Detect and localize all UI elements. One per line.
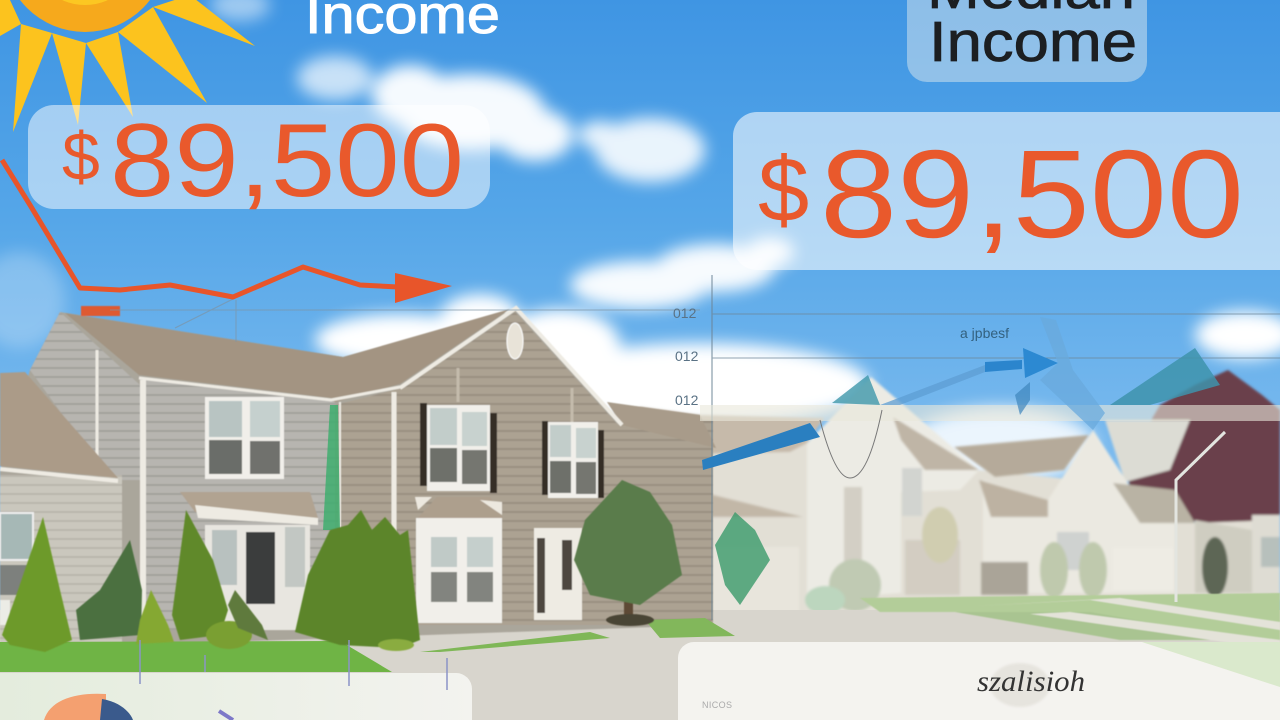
- house: tan gable siding: [400, 312, 618, 625]
- front door right: [534, 528, 582, 620]
- green chart shape: [715, 512, 770, 605]
- bottom-right panel: [678, 642, 1280, 720]
- main house: [0, 306, 716, 650]
- chart caption: a jpbesf: [960, 325, 1009, 341]
- backing wall for washed houses: [640, 443, 1280, 620]
- thin curve: [820, 410, 882, 478]
- garbled signature text: szalisioh: [977, 665, 1085, 698]
- window: upper right with shutters: [542, 421, 604, 498]
- line chart: orange trend arrow: [2, 160, 452, 303]
- porch door: [205, 525, 310, 630]
- pale pole: [1176, 432, 1225, 602]
- house: tan middle siding: [335, 388, 402, 630]
- antenna lines: [110, 298, 700, 342]
- stat panel right: [733, 112, 1280, 270]
- pie chart leader: [219, 711, 233, 720]
- house: grey siding: [140, 378, 335, 630]
- shrubs: [829, 559, 881, 611]
- gridline ticks: [140, 640, 447, 690]
- teal roof shards: [832, 348, 1220, 405]
- house: roof: [65, 309, 510, 402]
- axis label middle: 012: [675, 348, 699, 364]
- bottom-left panel: [0, 640, 472, 720]
- stat value left: $: [62, 119, 100, 195]
- chart band: [700, 405, 1280, 421]
- house: chimney: [81, 306, 120, 316]
- house backing wall: [0, 310, 712, 650]
- sun: [0, 0, 255, 132]
- lawn near garage: [645, 618, 735, 638]
- pale house top near tree: [1105, 420, 1190, 482]
- small caption: NICOS: [702, 700, 732, 710]
- bay window: [415, 497, 503, 623]
- house: right wing: [618, 420, 713, 625]
- axis label bottom: 012: [675, 392, 699, 408]
- clouds: [0, 0, 1280, 483]
- stat panel left: [28, 103, 490, 219]
- house: round gable vent: [507, 323, 523, 359]
- right lawn: [420, 632, 610, 652]
- house: left wing wall: [30, 312, 140, 480]
- heading right: Median Income chip: [907, 0, 1147, 82]
- ground base: [0, 610, 1280, 720]
- house: trims: [97, 308, 622, 625]
- axis label top: 012: [673, 305, 697, 321]
- house: centre left: [640, 377, 979, 613]
- stat value right: 89,500: [820, 125, 1244, 264]
- pie chart fragment: [44, 694, 133, 720]
- line chart: axis and grid: [712, 275, 1280, 620]
- window: upper left: [205, 397, 284, 479]
- heading text: Income: [929, 10, 1137, 74]
- overlay: green bar in house: [323, 405, 340, 530]
- window: upper centre with shutters: [420, 403, 497, 493]
- foreground lawn: [0, 641, 392, 672]
- left house: [0, 372, 122, 645]
- shrubs: [2, 510, 420, 652]
- green corner shape: [1142, 642, 1280, 687]
- distant lawn and road: [860, 593, 1280, 650]
- tree: dark red maple: [1126, 370, 1280, 560]
- brush mark: [990, 663, 1050, 707]
- blue trend arrow: [702, 317, 1105, 470]
- stat value left: 89,500: [110, 103, 464, 219]
- house: centre right: [954, 430, 1280, 598]
- porch awning: [180, 492, 318, 525]
- stat value right: $: [758, 139, 809, 241]
- tree: [574, 480, 682, 626]
- distant washed-out houses: [640, 370, 1280, 620]
